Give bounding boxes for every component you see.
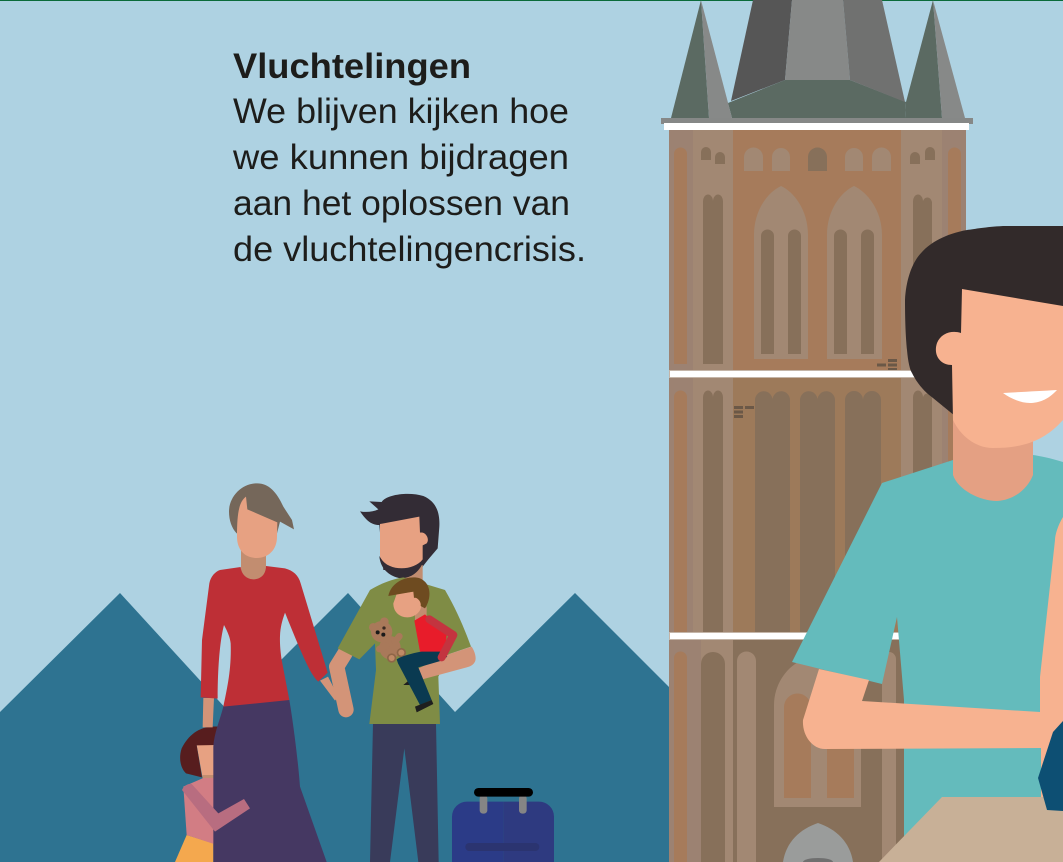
mountains xyxy=(0,593,680,862)
child on arm xyxy=(388,577,453,712)
heading and text block xyxy=(232,47,586,269)
dark blue object xyxy=(1038,721,1063,811)
suitcase xyxy=(452,788,554,862)
hair xyxy=(905,226,1063,416)
church tower xyxy=(661,0,973,862)
neck xyxy=(953,410,1033,501)
shirt xyxy=(792,455,1063,862)
family of refugees xyxy=(175,483,554,862)
smiling man in foreground xyxy=(792,226,1063,862)
tower roof xyxy=(661,0,973,130)
text line 4: de vluchtelingencrisis. xyxy=(233,230,586,269)
teddy bear xyxy=(369,617,406,663)
tower middle section xyxy=(669,377,966,633)
text line 2: we kunnen bijdragen xyxy=(232,138,569,177)
arms xyxy=(803,517,1063,800)
text line 1: We blijven kijken hoe xyxy=(233,92,569,131)
woman xyxy=(201,483,338,862)
white bands xyxy=(669,370,966,640)
face xyxy=(936,289,1063,448)
girl xyxy=(175,726,218,862)
man xyxy=(337,494,476,862)
heading: Vluchtelingen xyxy=(233,47,471,86)
girl's arm xyxy=(182,784,250,832)
smile xyxy=(1003,390,1057,403)
tower upper section xyxy=(669,125,966,375)
tower lower section xyxy=(669,639,966,862)
text line 3: aan het oplossen van xyxy=(233,184,570,223)
table xyxy=(879,797,1063,862)
